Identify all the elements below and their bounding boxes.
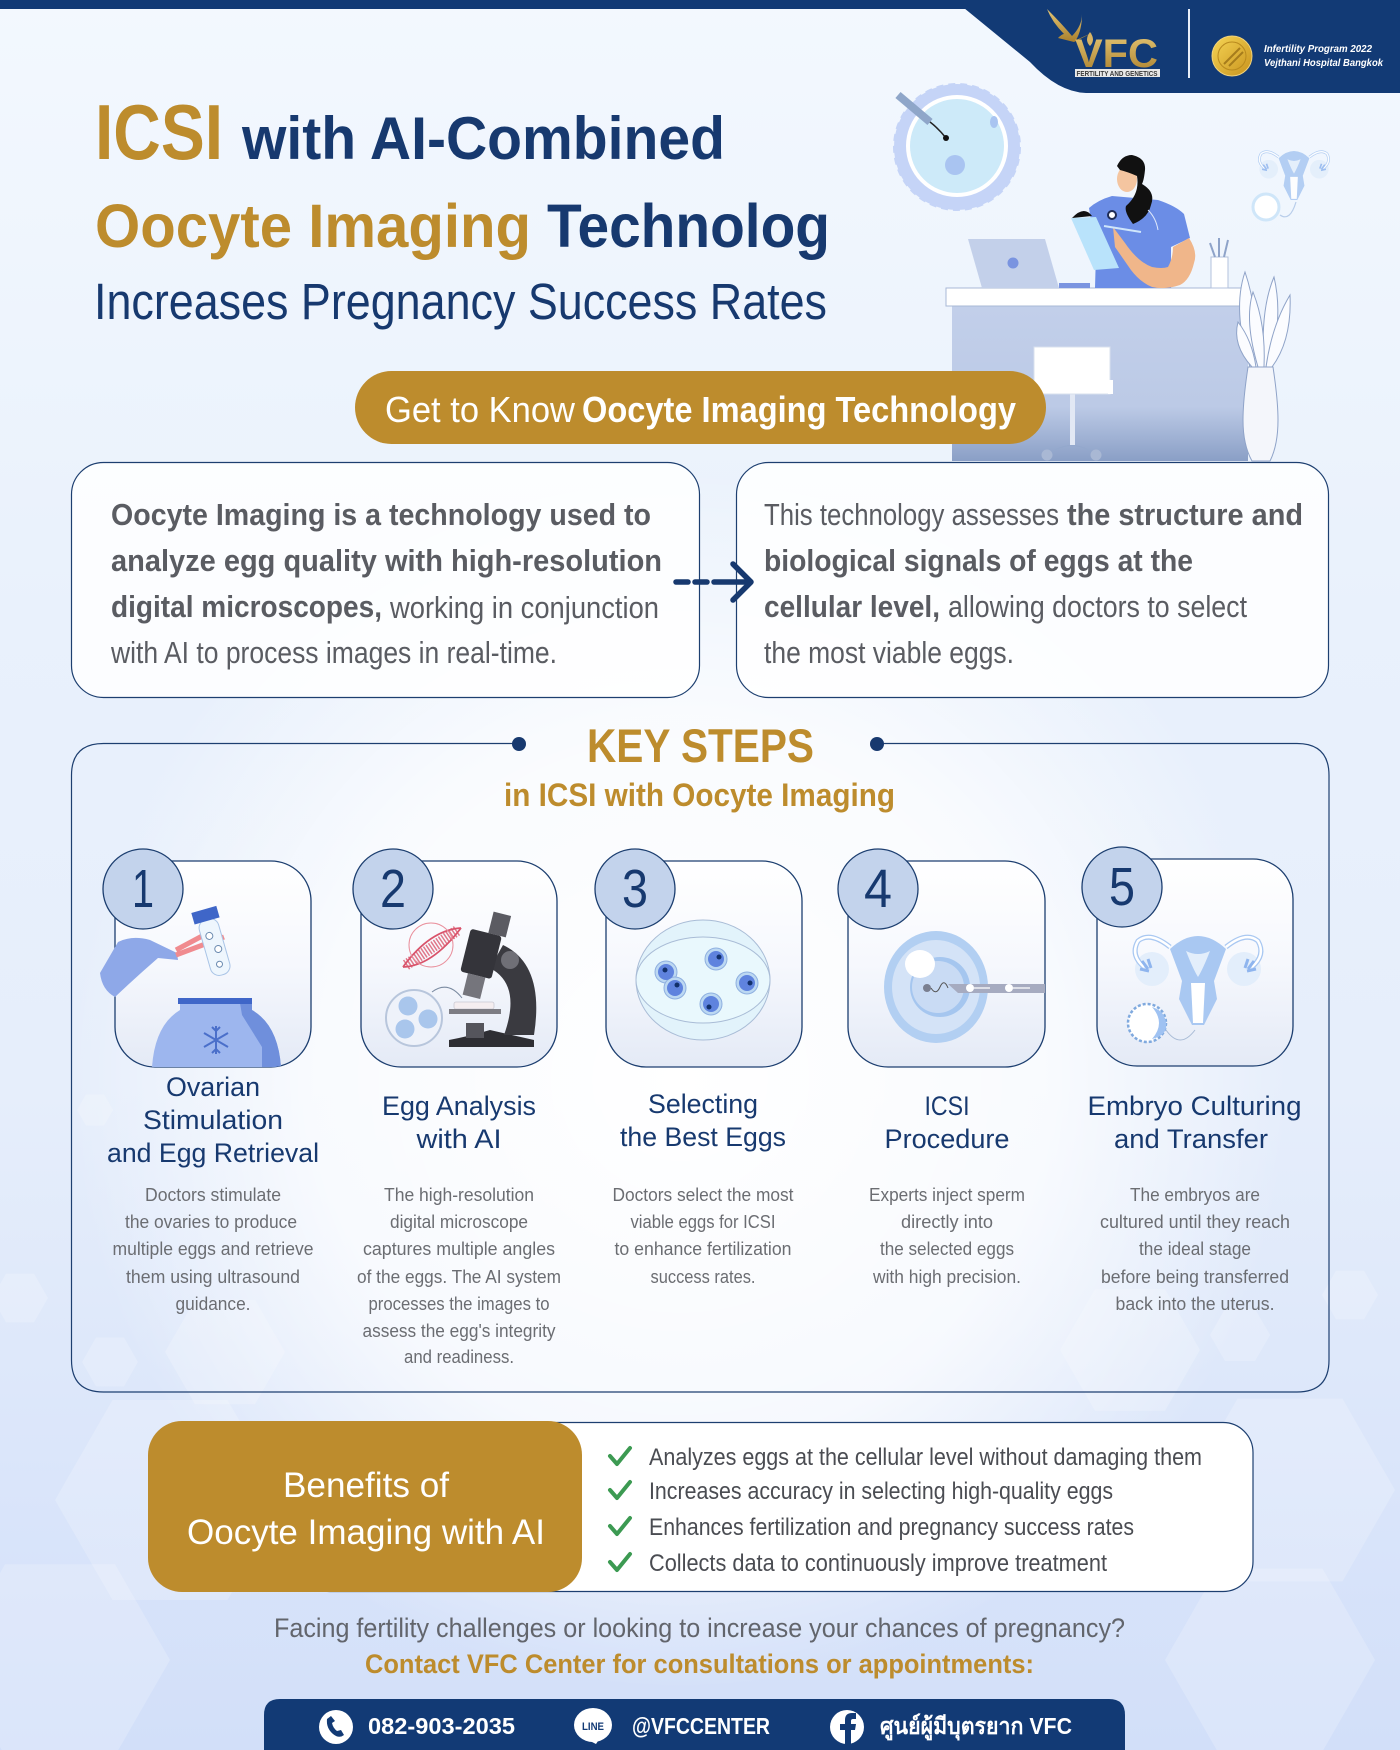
step title 2: with AI xyxy=(415,1124,502,1154)
number badge 3 xyxy=(595,849,675,929)
step description 1 xyxy=(112,1185,314,1314)
call to action: Facing fertility challenges or looking to increase your chances of pregnancy? xyxy=(274,1613,1125,1643)
step 2 xyxy=(353,849,561,1367)
doctor figure xyxy=(1071,155,1195,288)
step description 3: viable eggs for ICSI xyxy=(630,1212,776,1232)
icon: VFC bird xyxy=(1047,9,1094,46)
icon: cryo jar, glove and tube xyxy=(100,906,281,1067)
step description 2: processes the images to xyxy=(368,1294,550,1314)
line contact: @VFCCENTER xyxy=(632,1713,770,1739)
section pill heading: Oocyte Imaging Technology xyxy=(582,389,1016,430)
step description 5: back into the uterus. xyxy=(1116,1294,1274,1314)
line contact: LINE xyxy=(582,1721,604,1733)
number badge 4: 4 xyxy=(864,859,892,919)
section pill heading xyxy=(355,371,1046,444)
icon: ICSI injection xyxy=(884,931,1045,1043)
benefits heading: Oocyte Imaging with AI xyxy=(187,1513,545,1552)
step description 4: the selected eggs xyxy=(880,1239,1014,1259)
icon: egg with needle xyxy=(894,84,1020,210)
step description 4 xyxy=(869,1185,1025,1287)
accreditation text xyxy=(1264,43,1384,69)
facebook contact xyxy=(830,1710,1072,1744)
desk xyxy=(946,288,1248,461)
step title 3: Selecting xyxy=(648,1089,758,1119)
step description 1: multiple eggs and retrieve xyxy=(112,1239,314,1259)
step title 3: the Best Eggs xyxy=(620,1122,786,1152)
step description 3: to enhance fertilization xyxy=(614,1239,792,1259)
number badge 2: 2 xyxy=(380,859,406,919)
step description 2: and readiness. xyxy=(404,1347,514,1367)
panel: assessment: This technology assesses xyxy=(764,497,1059,532)
VFC logo: FERTILITY AND GENETICS xyxy=(1076,69,1158,78)
panel: definition xyxy=(72,462,700,698)
step title 1: Stimulation xyxy=(143,1105,283,1135)
accreditation text: Infertility Program 2022 xyxy=(1264,43,1372,55)
step title 2: Egg Analysis xyxy=(382,1091,536,1121)
phone contact: 082-903-2035 xyxy=(368,1713,515,1739)
chair xyxy=(1034,347,1113,460)
facebook contact: ศูนย์ผู้มีบุตรยาก VFC xyxy=(880,1713,1072,1741)
benefits heading xyxy=(148,1421,582,1592)
panel: assessment: the structure and xyxy=(1067,497,1303,532)
heading: key steps xyxy=(504,719,895,813)
step description 5 xyxy=(1100,1185,1290,1314)
step description 2: digital microscope xyxy=(390,1212,528,1232)
panel: assessment: the most viable eggs. xyxy=(764,635,1014,670)
number badge 3: 3 xyxy=(622,859,648,919)
icon: microscope, DNA and dish xyxy=(386,907,536,1047)
number badge 2 xyxy=(353,849,433,929)
benefit 4: Collects data to continuously improve treatment xyxy=(649,1550,1107,1577)
number badge 1 xyxy=(103,849,183,929)
icon: uterus and embryo xyxy=(1128,936,1261,1042)
step 5 xyxy=(1082,847,1302,1314)
panel: assessment: biological signals of eggs at the xyxy=(764,543,1193,578)
step description 5: cultured until they reach xyxy=(1100,1212,1290,1232)
pencil cup xyxy=(1210,238,1228,288)
step title 1 xyxy=(107,1072,319,1168)
step title 1: and Egg Retrieval xyxy=(107,1138,319,1168)
step 3 xyxy=(595,849,802,1287)
step title 3 xyxy=(620,1089,786,1152)
panel: assessment xyxy=(736,462,1328,698)
step description 3: Doctors select the most xyxy=(612,1185,794,1205)
title: Oocyte Imaging xyxy=(95,192,531,260)
plant xyxy=(1237,272,1290,461)
header band with logos xyxy=(0,0,1400,93)
section pill heading: Get to Know xyxy=(385,389,576,430)
benefit 3: Enhances fertilization and pregnancy success rates xyxy=(649,1514,1134,1541)
step description 5: before being transferred xyxy=(1101,1267,1289,1287)
step description 1: guidance. xyxy=(176,1294,250,1314)
icon: petri dish xyxy=(636,920,770,1040)
step description 1: them using ultrasound xyxy=(126,1267,300,1287)
number badge 1: 1 xyxy=(132,859,154,919)
step title 5: and Transfer xyxy=(1114,1124,1268,1154)
step description 4: directly into xyxy=(901,1212,993,1232)
contact bar xyxy=(264,1699,1125,1750)
step description 2: captures multiple angles xyxy=(363,1239,555,1259)
step title 4: Procedure xyxy=(884,1124,1010,1154)
number badge 5: 5 xyxy=(1109,857,1135,917)
heading: key steps: KEY STEPS xyxy=(587,719,814,772)
step title 1: Ovarian xyxy=(166,1072,260,1102)
title: Technolog xyxy=(547,192,830,260)
title: ICSI xyxy=(95,88,223,176)
panel: key steps xyxy=(72,719,1329,1392)
laptop xyxy=(968,239,1090,288)
panel: definition: Oocyte Imaging is a technology used to xyxy=(111,497,651,532)
line contact xyxy=(574,1708,770,1744)
arrow between panels xyxy=(676,564,751,600)
icon: gold seal xyxy=(1212,36,1252,76)
panel: definition: analyze egg quality with high-resolution xyxy=(111,543,662,578)
benefit 2: Increases accuracy in selecting high-quality eggs xyxy=(649,1478,1113,1505)
benefits heading: Benefits of xyxy=(283,1466,449,1505)
benefit 1: Analyzes eggs at the cellular level without damaging them xyxy=(649,1444,1202,1471)
icon: uterus small xyxy=(1253,151,1329,220)
number badge 5 xyxy=(1082,847,1162,927)
step description 2: of the eggs. The AI system xyxy=(357,1267,561,1287)
VFC logo: VFC xyxy=(1075,32,1158,76)
step title 2 xyxy=(382,1091,536,1154)
number badge 4 xyxy=(838,849,918,929)
step title 4: ICSI xyxy=(924,1091,970,1121)
step description 4: Experts inject sperm xyxy=(869,1185,1025,1205)
step 1 xyxy=(100,849,319,1314)
phone contact xyxy=(319,1710,515,1744)
step title 5 xyxy=(1088,1091,1302,1154)
step 4 xyxy=(838,849,1045,1287)
step description 3: success rates. xyxy=(650,1267,756,1287)
step description 1: the ovaries to produce xyxy=(125,1212,297,1232)
step description 1: Doctors stimulate xyxy=(145,1185,281,1205)
step description 5: The embryos are xyxy=(1130,1185,1260,1205)
panel: benefits xyxy=(148,1421,1253,1592)
call to action: Contact VFC Center for consultations or appointments: xyxy=(365,1649,1034,1679)
accreditation text: Vejthani Hospital Bangkok xyxy=(1264,57,1384,69)
illustration: doctor at desk xyxy=(894,84,1329,461)
panel: definition: with AI to process images in real-time. xyxy=(110,635,557,670)
step description 5: the ideal stage xyxy=(1139,1239,1251,1259)
title xyxy=(94,88,830,330)
step title 5: Embryo Culturing xyxy=(1088,1091,1302,1121)
heading: key steps: in ICSI with Oocyte Imaging xyxy=(504,777,895,813)
panel: assessment: cellular level, xyxy=(764,589,940,624)
step description 4: with high precision. xyxy=(872,1267,1021,1287)
call to action xyxy=(274,1613,1125,1679)
panel: definition: working in conjunction xyxy=(389,590,659,625)
step description 2: assess the egg's integrity xyxy=(362,1321,556,1341)
step description 2: The high-resolution xyxy=(384,1185,534,1205)
step description 2 xyxy=(357,1185,561,1367)
title: with AI-Combined xyxy=(241,105,725,172)
panel: definition: digital microscopes, xyxy=(111,589,382,624)
step title 4 xyxy=(884,1091,1010,1154)
step description 3 xyxy=(612,1185,794,1287)
title: Increases Pregnancy Success Rates xyxy=(94,273,827,330)
panel: assessment: allowing doctors to select xyxy=(948,589,1247,624)
